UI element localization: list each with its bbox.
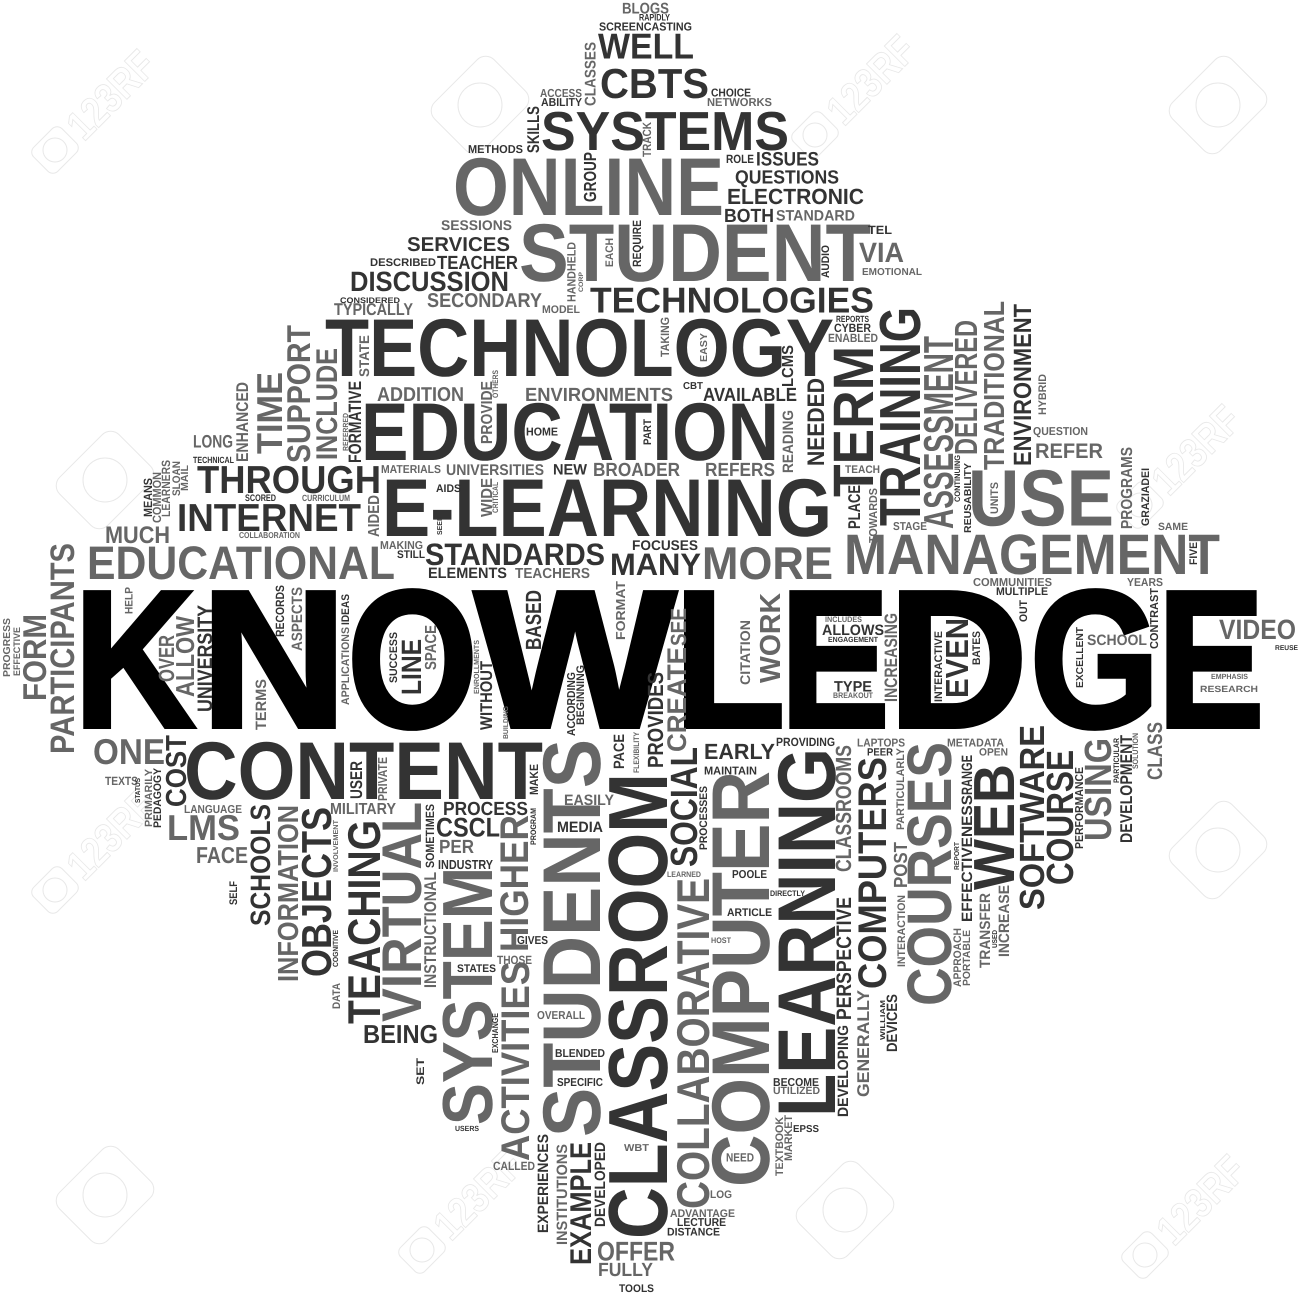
small horizontal words: PROVIDING bbox=[776, 735, 835, 749]
large vertical words: EXAMPLE bbox=[565, 1142, 598, 1265]
small horizontal words: LECTURE bbox=[677, 1217, 726, 1229]
small vertical words: NEEDED bbox=[803, 378, 830, 466]
small horizontal words: SCORED bbox=[245, 493, 276, 504]
small vertical words: STATE bbox=[356, 335, 372, 377]
small horizontal words: COLLABORATION bbox=[239, 530, 300, 540]
large vertical words: VIRTUAL bbox=[370, 802, 433, 1022]
title word: KNOWLEDGE: W bbox=[474, 550, 676, 769]
small horizontal words: PEER bbox=[867, 746, 893, 758]
small vertical words: OTHERS bbox=[491, 369, 500, 398]
small vertical words: BASED bbox=[521, 590, 546, 650]
large vertical words: INFORMATION bbox=[273, 805, 305, 982]
small vertical words: INCREASING bbox=[881, 613, 901, 702]
large horizontal words: TECHNOLOGIES bbox=[590, 280, 874, 320]
small horizontal words: PROCESS bbox=[443, 799, 528, 820]
small horizontal words: MUCH bbox=[105, 522, 170, 549]
small vertical words: INVOLVEMENT bbox=[333, 819, 340, 872]
small horizontal words: UTILIZED bbox=[773, 1085, 820, 1097]
small vertical words: PARTICULAR bbox=[1112, 738, 1121, 783]
small horizontal words: TEACH bbox=[845, 464, 880, 476]
small horizontal words: HOST bbox=[711, 936, 731, 945]
small vertical words: EFFECTIVE bbox=[12, 627, 23, 676]
small vertical words: SOMETIMES bbox=[423, 804, 437, 868]
large vertical words: ENVIRONMENT bbox=[1009, 304, 1037, 466]
small horizontal words: AVAILABLE bbox=[703, 385, 797, 406]
small horizontal words: RAPIDLY bbox=[639, 12, 671, 24]
small horizontal words: METHODS bbox=[468, 144, 523, 156]
large horizontal words: EDUCATION bbox=[361, 387, 779, 478]
small vertical words: PROGRAMS bbox=[1119, 447, 1136, 529]
large vertical words: LINE bbox=[396, 639, 427, 695]
small horizontal words: TEACHERS bbox=[515, 566, 590, 582]
large horizontal words: DISCUSSION bbox=[350, 266, 509, 297]
small horizontal words: ELECTRONIC bbox=[727, 184, 864, 209]
small horizontal words: NEW bbox=[553, 462, 588, 478]
small vertical words: CLASSROOMS bbox=[831, 745, 856, 872]
large horizontal words: WELL bbox=[598, 26, 694, 66]
small vertical words: DATA bbox=[331, 983, 343, 1009]
small vertical words: GROUP bbox=[580, 152, 600, 202]
large vertical words: CREATE bbox=[662, 647, 692, 752]
small vertical words: PRIMARILY bbox=[143, 769, 155, 827]
small horizontal words: REUSE bbox=[1275, 645, 1298, 652]
small horizontal words: CHOICE bbox=[711, 88, 751, 100]
small horizontal words: QUESTION bbox=[1033, 426, 1088, 438]
small vertical words: MARKET bbox=[783, 1115, 795, 1161]
small vertical words: HYBRID bbox=[1037, 374, 1049, 415]
small vertical words: PROGRESS bbox=[2, 618, 13, 677]
small vertical words: SLOAN bbox=[171, 461, 183, 496]
watermarks: faint stock-photo logos: 123RF bbox=[817, 26, 925, 134]
small horizontal words: REFERS bbox=[705, 460, 775, 481]
large vertical words: CLASSROOM bbox=[591, 773, 685, 1239]
small horizontal words: THOSE bbox=[497, 953, 532, 967]
large vertical words: COURSE bbox=[1040, 750, 1082, 885]
small horizontal words: EARLY bbox=[704, 739, 775, 764]
small horizontal words: EASILY bbox=[564, 792, 614, 809]
large vertical words: SUPPORT bbox=[280, 325, 317, 463]
large vertical words: SCHOOLS bbox=[245, 804, 276, 926]
small vertical words: CRITICAL bbox=[491, 482, 500, 513]
small vertical words: DEVICES bbox=[884, 994, 901, 1052]
small horizontal words: LONG bbox=[193, 432, 233, 452]
small vertical words: SOLUTION bbox=[1131, 733, 1140, 769]
small vertical words: SUCCESS bbox=[388, 632, 400, 683]
small horizontal words: MULTIPLE bbox=[996, 586, 1048, 598]
large horizontal words: BEING bbox=[363, 1019, 438, 1049]
small vertical words: TOWARDS bbox=[868, 488, 880, 543]
large horizontal words: STANDARDS bbox=[425, 537, 605, 572]
small vertical words: WILLIAM bbox=[880, 1000, 887, 1040]
large vertical words: STUDENTS bbox=[527, 739, 618, 1137]
small vertical words: COGNITIVE bbox=[331, 930, 340, 967]
large horizontal words: MANY bbox=[610, 547, 701, 582]
small vertical words: PERFORMANCE bbox=[1074, 767, 1086, 849]
small vertical words: BATES bbox=[971, 631, 983, 665]
small horizontal words: SCREENCASTING bbox=[599, 20, 692, 34]
large vertical words: DELIVERED bbox=[948, 320, 984, 455]
large horizontal words: TECHNOLOGY bbox=[325, 303, 834, 394]
small horizontal words: FOCUSES bbox=[632, 537, 698, 553]
small horizontal words: TYPE bbox=[834, 678, 872, 696]
small horizontal words: CURRICULUM bbox=[302, 493, 350, 503]
small vertical words: READING bbox=[780, 410, 797, 473]
small horizontal words: BECOME bbox=[773, 1077, 819, 1089]
small horizontal words: SERVICES bbox=[407, 234, 510, 256]
small horizontal words: CYBER bbox=[834, 321, 871, 335]
large horizontal words: ONLINE bbox=[453, 142, 724, 233]
large vertical words: TERM bbox=[822, 346, 886, 497]
large vertical words: LEARNING bbox=[762, 748, 853, 1117]
small vertical words: TRACK bbox=[640, 122, 654, 157]
large vertical words: INCLUDE bbox=[311, 348, 344, 460]
small vertical words: INCREASE bbox=[996, 885, 1013, 957]
large horizontal words: CSCL bbox=[436, 812, 500, 842]
small horizontal words: MEDIA bbox=[557, 819, 603, 836]
large vertical words: TRADITIONAL bbox=[979, 301, 1011, 470]
small horizontal words: TEXTS bbox=[105, 774, 138, 788]
small horizontal words: MAINTAIN bbox=[704, 766, 757, 778]
large vertical words: SEE bbox=[666, 608, 691, 646]
small vertical words: WITHOUT bbox=[477, 660, 496, 730]
small vertical words: UNITS bbox=[989, 482, 1001, 514]
small horizontal words: OPEN bbox=[979, 746, 1008, 758]
small vertical words: CLASS bbox=[1144, 722, 1167, 780]
small vertical words: INTERACTIVE bbox=[933, 631, 945, 702]
small horizontal words: ABILITY bbox=[541, 97, 582, 109]
large vertical words bbox=[16, 301, 1120, 1265]
large horizontal words: INTERNET bbox=[177, 497, 361, 540]
small horizontal words: SPECIFIC bbox=[557, 1077, 603, 1089]
small horizontal words: BREAKOUT bbox=[833, 691, 873, 700]
small horizontal words: MILITARY bbox=[330, 801, 396, 818]
small horizontal words: INCLUDES bbox=[825, 615, 863, 624]
small vertical words: ACCORDING bbox=[566, 672, 578, 736]
watermarks: faint stock-photo logos: 123RF bbox=[57, 41, 165, 149]
small vertical words: DEVELOPED bbox=[592, 1142, 609, 1227]
small vertical words: PARTICULARLY bbox=[895, 747, 907, 830]
small vertical words: TAKING bbox=[658, 317, 672, 357]
small horizontal words: FACE bbox=[196, 842, 248, 868]
small horizontal words: REPORTS bbox=[836, 314, 869, 324]
small horizontal words: DISTANCE bbox=[667, 1226, 720, 1238]
large vertical words: HIGHER bbox=[493, 815, 537, 952]
small vertical words: APPROACH bbox=[952, 928, 964, 987]
small vertical words: FORMAT bbox=[613, 581, 628, 640]
small vertical words: OVER bbox=[154, 635, 179, 682]
small horizontal words: COMMUNITIES bbox=[973, 577, 1052, 589]
small vertical words: SELF bbox=[228, 881, 240, 905]
small horizontal words: REFER bbox=[1035, 440, 1103, 463]
small horizontal words: ADVANTAGE bbox=[670, 1208, 735, 1220]
small horizontal words: BLENDED bbox=[555, 1048, 605, 1060]
small vertical words: OUT bbox=[1018, 600, 1030, 622]
small vertical words: LEARNERS bbox=[159, 460, 173, 517]
small horizontal words: NEED bbox=[726, 1150, 754, 1164]
small vertical words: EFFECTIVENESS bbox=[959, 795, 976, 922]
large horizontal words: LMS bbox=[167, 807, 240, 848]
large horizontal words: MORE bbox=[702, 537, 833, 589]
small vertical words: INTERACTION bbox=[896, 895, 908, 967]
small horizontal words: SCHOOL bbox=[1087, 632, 1147, 649]
small horizontal words: FULLY bbox=[598, 1260, 653, 1281]
large horizontal words: USE bbox=[968, 454, 1114, 542]
watermarks: faint stock-photo logos: 123RF bbox=[1142, 396, 1250, 504]
small horizontal words: STILL bbox=[397, 549, 425, 561]
small horizontal words: LEARNED bbox=[667, 870, 701, 879]
small vertical words: UNIVERSITY bbox=[194, 605, 217, 712]
small horizontal words: ADDITION bbox=[377, 384, 464, 406]
small horizontal words: MAKING bbox=[380, 540, 423, 552]
small vertical words: PEDAGOGY bbox=[152, 767, 164, 828]
large vertical words: COMPUTERS bbox=[851, 757, 895, 989]
small vertical words: REPORT bbox=[954, 841, 961, 870]
small vertical words: SKILLS bbox=[524, 106, 543, 153]
small vertical words: REQUIRE bbox=[630, 220, 644, 267]
large vertical words: TRAINING bbox=[868, 307, 933, 526]
small vertical words: PROVIDE bbox=[479, 381, 496, 444]
small horizontal words: EPSS bbox=[793, 1124, 819, 1135]
large horizontal words: VIA bbox=[859, 237, 904, 268]
small vertical words: TERMS bbox=[253, 679, 270, 730]
small horizontal words: BROADER bbox=[593, 460, 680, 481]
small vertical words: FLEXIBILITY bbox=[632, 731, 641, 773]
small vertical words: PORTABLE bbox=[961, 930, 973, 986]
small vertical words: BUILDING bbox=[503, 705, 510, 739]
large vertical words: SOFTWARE bbox=[1013, 725, 1052, 910]
small horizontal words: SESSIONS bbox=[441, 217, 512, 233]
small vertical words: PLACE bbox=[845, 485, 864, 529]
large horizontal words: MANAGEMENT bbox=[844, 523, 1220, 587]
watermarks: faint stock-photo logos: 123RF bbox=[1147, 1146, 1255, 1254]
small horizontal words: NETWORKS bbox=[707, 97, 772, 109]
small vertical words: PRIVATE bbox=[375, 757, 390, 801]
small vertical words: EACH bbox=[604, 238, 616, 267]
small vertical words: PROVIDES bbox=[643, 672, 668, 768]
small horizontal words: GIVES bbox=[517, 935, 548, 947]
small vertical words: USER bbox=[347, 761, 366, 799]
small horizontal words: POOLE bbox=[732, 869, 767, 881]
small horizontal words: HOME bbox=[526, 426, 558, 438]
small vertical words: INSTITUTIONS bbox=[554, 1144, 571, 1245]
small vertical words: CONTINUING bbox=[953, 455, 962, 502]
small horizontal words: INDUSTRY bbox=[438, 857, 493, 872]
large horizontal words: CONTENT bbox=[184, 726, 543, 817]
large horizontal words: E-LEARNING bbox=[382, 463, 832, 554]
small vertical words: REUSABILITY bbox=[963, 463, 974, 533]
small horizontal words: OVERALL bbox=[537, 1010, 585, 1022]
small horizontal words: ISSUES bbox=[756, 148, 819, 170]
large vertical words: PARTICIPANTS bbox=[44, 543, 82, 754]
small vertical words: RANGE bbox=[959, 755, 976, 795]
small vertical words: DEVELOPMENT bbox=[1117, 734, 1136, 843]
small horizontal words: MATERIALS bbox=[381, 464, 441, 476]
small vertical words: HELP bbox=[124, 587, 136, 614]
small horizontal words: ALLOWS bbox=[822, 622, 884, 639]
small vertical words: DEVELOPING bbox=[835, 1025, 852, 1117]
large vertical words: COST bbox=[161, 735, 193, 807]
small vertical words: PROGRAM bbox=[529, 808, 538, 845]
title word: KNOWLEDGE: N bbox=[200, 550, 348, 769]
small vertical words: TRANSFER bbox=[977, 893, 994, 968]
small vertical words: BEGINNING bbox=[575, 665, 587, 725]
small vertical words: LCMS bbox=[780, 345, 797, 387]
small horizontal words: STAGE bbox=[893, 521, 927, 533]
small horizontal words: ARTICLE bbox=[727, 907, 772, 919]
small vertical words: MAKE bbox=[527, 764, 541, 795]
small horizontal words: LANGUAGE bbox=[184, 804, 242, 816]
small vertical words: MAIL bbox=[179, 464, 191, 491]
small vertical words: HANDHELD bbox=[564, 242, 578, 302]
small vertical words: CORP bbox=[578, 271, 585, 292]
small vertical words: GENERALLY bbox=[854, 989, 873, 1097]
small horizontal words: AIDS bbox=[436, 483, 461, 495]
small horizontal words: LAPTOPS bbox=[857, 738, 905, 750]
small vertical words: CLASSES bbox=[582, 42, 600, 106]
small vertical words: EXPERIENCES bbox=[535, 1134, 552, 1233]
small vertical words: SET bbox=[415, 1058, 427, 1085]
large horizontal words: CBTS bbox=[600, 60, 709, 107]
small horizontal words: LOG bbox=[710, 1189, 732, 1201]
large vertical words: TEACHING bbox=[338, 820, 390, 1024]
small horizontal words: STANDARD bbox=[776, 208, 855, 224]
small horizontal words: USERS bbox=[455, 1124, 479, 1133]
large vertical words: COLLABORATIVE bbox=[667, 878, 719, 1209]
title word: KNOWLEDGE: O bbox=[347, 550, 478, 769]
small horizontal words: MODEL bbox=[542, 304, 580, 316]
small horizontal words: STATES bbox=[457, 963, 496, 975]
small vertical words: TEXTBOOK bbox=[774, 1117, 786, 1176]
small horizontal words: ROLE bbox=[726, 152, 754, 166]
large vertical words: SYSTEM bbox=[429, 867, 508, 1125]
large horizontal words: OFFER bbox=[597, 1236, 675, 1266]
small vertical words: SPACE bbox=[423, 625, 440, 670]
large vertical words: ACTIVITIES bbox=[494, 961, 538, 1161]
small horizontal words: CALLED bbox=[493, 1159, 535, 1173]
small horizontal words: WBT bbox=[624, 1143, 649, 1154]
large vertical words: ASSESSMENT bbox=[915, 336, 962, 529]
small horizontal words: METADATA bbox=[947, 738, 1004, 750]
small vertical words: RECORDS bbox=[273, 585, 287, 637]
small horizontal words: ENVIRONMENTS bbox=[525, 385, 673, 406]
small vertical words: ENROLLMENTS bbox=[472, 640, 481, 694]
small vertical words: AIDED bbox=[366, 495, 383, 537]
large vertical words: USING bbox=[1078, 738, 1120, 841]
small vertical words: FORMATIVE bbox=[345, 381, 365, 463]
small horizontal words: TYPICALLY bbox=[334, 300, 414, 319]
small horizontal words: BOTH bbox=[724, 206, 774, 227]
small vertical words: ASPECTS bbox=[289, 587, 306, 651]
small horizontal words: CBT bbox=[683, 381, 703, 392]
large vertical words: FORM bbox=[16, 614, 53, 701]
large vertical words: ALLOW bbox=[170, 616, 200, 697]
small vertical words: POST bbox=[891, 842, 912, 888]
small vertical words: EASY bbox=[699, 333, 710, 362]
small horizontal words: BLOGS bbox=[622, 0, 669, 17]
small vertical words: COMMON bbox=[150, 472, 164, 523]
small horizontal words: ENABLED bbox=[828, 331, 878, 345]
large vertical words: SOCIAL bbox=[664, 747, 706, 867]
large vertical words: WORK bbox=[755, 593, 787, 683]
small horizontal words: UNIVERSITIES bbox=[446, 462, 544, 479]
small vertical words: REFERRED bbox=[341, 412, 350, 451]
small horizontal words: TECHNICAL bbox=[193, 455, 234, 465]
small vertical words: PROCESSES bbox=[698, 786, 710, 850]
small vertical words: SEEN bbox=[437, 516, 444, 535]
title word: KNOWLEDGE: G bbox=[1030, 550, 1160, 769]
title word: KNOWLEDGE: K bbox=[74, 550, 196, 769]
small vertical words: INSTRUCTIONAL bbox=[421, 872, 440, 988]
large vertical words: WEB bbox=[962, 764, 1027, 890]
small vertical words: WIDE bbox=[479, 478, 496, 517]
small horizontal words: ENGAGEMENT bbox=[828, 635, 878, 644]
title word: KNOWLEDGE: E bbox=[780, 550, 890, 769]
small horizontal words: PER bbox=[439, 837, 474, 858]
large vertical words: OBJECTS bbox=[293, 807, 340, 977]
large horizontal words: THROUGH bbox=[197, 459, 381, 502]
small horizontal words: DIRECTLY bbox=[770, 889, 806, 898]
small vertical words: APPLICATIONS bbox=[340, 627, 352, 705]
small horizontal words: ACCESS bbox=[540, 87, 582, 100]
small vertical words: FIVE bbox=[1188, 542, 1200, 565]
large vertical words: COURSES bbox=[895, 742, 965, 1006]
small vertical words: ENHANCED bbox=[233, 382, 252, 462]
small horizontal words: CONSIDERED bbox=[340, 296, 400, 305]
small vertical words: USED bbox=[992, 930, 999, 948]
small vertical words: CITATION bbox=[737, 620, 753, 685]
small vertical words: AUDIO bbox=[820, 245, 832, 278]
small horizontal words: TEACHER bbox=[437, 253, 518, 274]
large vertical words: EVEN bbox=[939, 618, 975, 698]
small vertical words: STATUS bbox=[135, 778, 142, 803]
small vertical words: MEANS bbox=[141, 478, 155, 517]
small horizontal words: EMOTIONAL bbox=[862, 267, 922, 278]
small vertical words: GRAZIADEI bbox=[1140, 468, 1152, 526]
small vertical words: EXCHANGE bbox=[490, 1013, 500, 1053]
title word: KNOWLEDGE: E bbox=[1157, 550, 1264, 769]
watermarks: faint stock-photo logos: 123RF bbox=[57, 781, 165, 889]
small horizontal words: EMPHASIS bbox=[1211, 672, 1248, 681]
small horizontal words: YEARS bbox=[1127, 577, 1163, 589]
large vertical words: COMPUTER bbox=[696, 771, 787, 1187]
small horizontal words: RESEARCH bbox=[1200, 684, 1258, 694]
large vertical words: TIME bbox=[249, 372, 290, 454]
watermarks: faint stock-photo logos: 123RF bbox=[424, 1141, 532, 1249]
small vertical words: PERSPECTIVE bbox=[833, 897, 856, 1020]
small horizontal words: SECONDARY bbox=[427, 290, 543, 312]
large horizontal words: EDUCATIONAL bbox=[87, 536, 395, 589]
small vertical words: PACE bbox=[611, 734, 628, 769]
small vertical words: IDEAS bbox=[340, 594, 352, 625]
small horizontal words: ELEMENTS bbox=[428, 565, 507, 582]
small vertical words: CONTRAST bbox=[1149, 588, 1161, 649]
title word: KNOWLEDGE: L bbox=[674, 550, 786, 769]
title word: KNOWLEDGE: D bbox=[888, 550, 1028, 769]
small horizontal words: QUESTIONS bbox=[735, 168, 839, 188]
small vertical words: PART bbox=[642, 419, 654, 445]
small horizontal words: TEL bbox=[868, 223, 892, 237]
large horizontal words: SYSTEMS bbox=[541, 100, 789, 162]
large horizontal words: STUDENT bbox=[519, 208, 871, 299]
small vertical words: EXCELLENT bbox=[1075, 627, 1086, 688]
small horizontal words: SAME bbox=[1158, 521, 1188, 533]
small horizontal words: DESCRIBED bbox=[370, 257, 436, 269]
large horizontal words: ONE bbox=[93, 731, 165, 772]
